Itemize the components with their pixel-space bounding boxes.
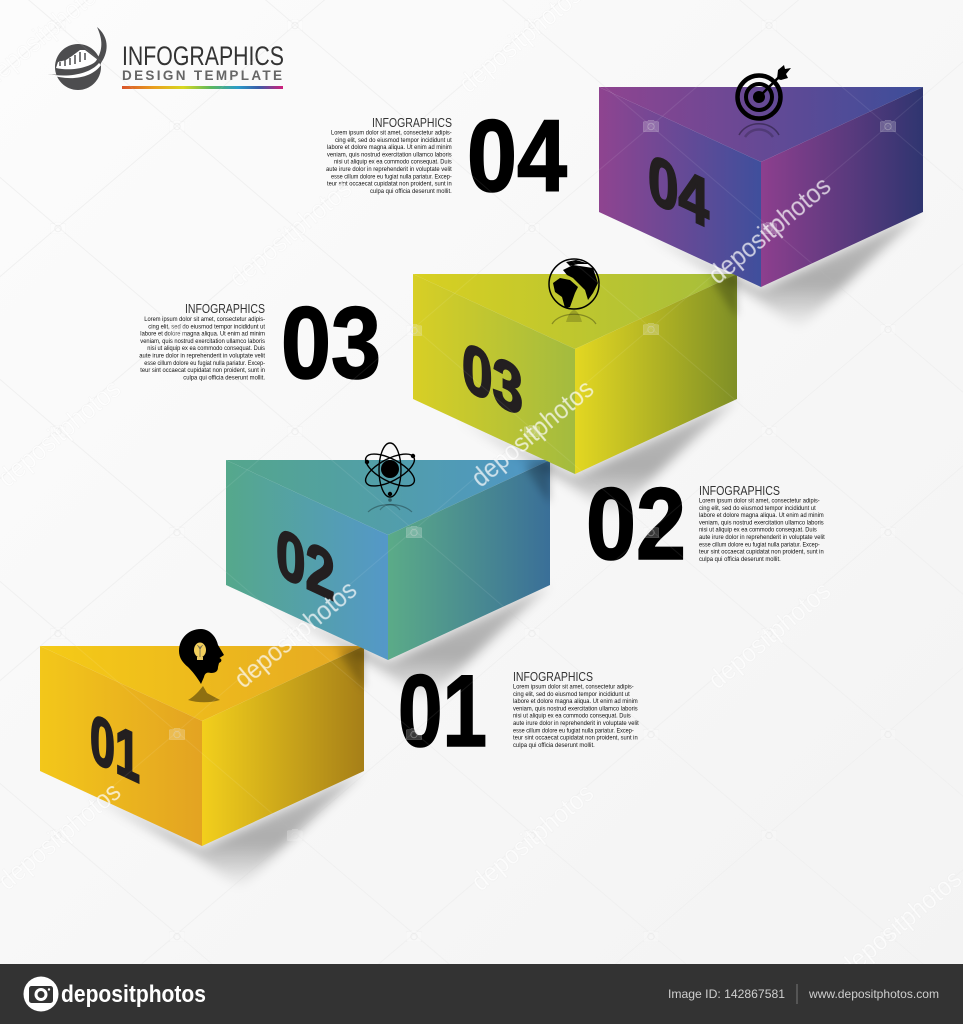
top face — [413, 274, 737, 349]
face number 03: 03 — [462, 327, 523, 431]
body text 02: nisi ut aliquip ex ea commodo consequat. Duis — [699, 527, 817, 534]
step 04 label — [326, 99, 567, 213]
watermark: camera grid — [50, 19, 896, 942]
body text 02: esse cillum dolore eu fugiat nulla pariatur. Excep- — [699, 541, 820, 548]
footer brand name: depositphotos — [61, 981, 206, 1008]
body text 04: veniam, quis nostrud exercitation ullamco laboris — [327, 151, 452, 158]
left face — [226, 460, 388, 660]
step 01 block — [40, 629, 364, 888]
left face — [40, 646, 202, 846]
right face — [575, 274, 737, 474]
step 01 label — [398, 654, 639, 768]
step 03 label — [139, 286, 381, 400]
body text 03: veniam, quis nostrud exercitation ullamco laboris — [140, 338, 266, 345]
body text 01: aute irure dolor in reprehenderit in voluptate velit — [513, 720, 639, 727]
right face — [202, 646, 364, 846]
body text 01: labore et dolore magna aliqua. Ut enim ad minim — [513, 698, 638, 705]
body text 01: culpa qui officia deserunt mollit. — [513, 742, 595, 749]
body text 02: cing elit, sed do eiusmod tempor incididunt ut — [699, 505, 816, 512]
heading 04: INFOGRAPHICS — [372, 116, 452, 130]
body text 03 — [139, 316, 266, 381]
body text 02 — [699, 498, 825, 563]
body text 02: culpa qui officia deserunt mollit. — [699, 556, 781, 563]
step 04 block — [599, 65, 923, 329]
icon: target with arrow — [738, 65, 791, 137]
body text 04 — [326, 130, 452, 195]
logo: infographics design template — [48, 27, 284, 90]
body text 01: nisi ut aliquip ex ea commodo consequat. Duis — [513, 713, 631, 720]
watermark: depositphotos text: depositphotos — [465, 777, 599, 897]
image id: Image ID: 142867581 — [668, 987, 785, 1001]
face number 04: 04 — [648, 139, 709, 244]
left face — [413, 274, 575, 474]
body text 04: esse cillum dolore eu fugiat nulla pariatur. Excep- — [331, 173, 452, 180]
top face — [599, 87, 923, 162]
icon: logo globe with leaf — [48, 27, 107, 90]
body text 03: teur sint occaecat cupidatat non proident, sunt in — [140, 367, 265, 374]
face number 01: 01 — [90, 699, 140, 798]
big number 01: 01 — [398, 654, 487, 768]
body text 01: Lorem ipsum dolor sit amet, consectetur adipis- — [513, 684, 634, 690]
heading 01: INFOGRAPHICS — [513, 670, 593, 684]
big number 03: 03 — [281, 286, 381, 400]
body text 03: aute irure dolor in reprehenderit in voluptate velit — [139, 352, 265, 360]
body text 04: teur sint occaecat cupidatat non proident, sunt in — [327, 181, 452, 188]
body text 03: esse cillum dolore eu fugiat nulla pariatur. Excep- — [144, 360, 265, 367]
step 03 block — [413, 259, 737, 516]
footer bar — [0, 964, 963, 1024]
body text 04: aute irure dolor in reprehenderit in voluptate velit — [326, 166, 452, 173]
icon: globe — [549, 259, 599, 324]
body text 04: labore et dolore magna aliqua. Ut enim ad minim — [327, 144, 452, 151]
body text 01 — [513, 684, 639, 749]
heading 03: INFOGRAPHICS — [185, 302, 265, 316]
big number 02: 02 — [586, 467, 686, 581]
body text 03: nisi ut aliquip ex ea commodo consequat. Duis — [147, 345, 266, 352]
logo subtitle: DESIGN TEMPLATE — [122, 68, 282, 83]
body text 02: veniam, quis nostrud exercitation ullamco laboris — [699, 519, 824, 526]
body text 02: Lorem ipsum dolor sit amet, consectetur adipis- — [699, 498, 820, 504]
body text 04: culpa qui officia deserunt mollit. — [370, 188, 452, 195]
heading 02: INFOGRAPHICS — [699, 484, 780, 498]
body text 02: teur sint occaecat cupidatat non proident, sunt in — [699, 549, 824, 556]
body text 03: Lorem ipsum dolor sit amet, consectetur adipis- — [144, 316, 265, 323]
right face — [388, 460, 550, 660]
body text 02: labore et dolore magna aliqua. Ut enim ad minim — [699, 512, 824, 519]
icon: depositphotos camera — [24, 976, 58, 1012]
watermark: depositphotos text: depositphotos — [702, 575, 836, 695]
body text 04: nisi ut aliquip ex ea commodo consequat. Duis — [334, 159, 452, 166]
body text 01: veniam, quis nostrud exercitation ullamco laboris — [513, 705, 638, 712]
step 02 block — [226, 443, 550, 702]
logo title: INFOGRAPHICS — [122, 41, 284, 71]
body text 01: teur sint occaecat cupidatat non proident, sunt in — [513, 735, 638, 742]
footer url: www.depositphotos.com — [808, 987, 939, 1001]
watermark: depositphotos text: depositphotos — [228, 574, 362, 694]
body text 03: labore et dolore magna aliqua. Ut enim ad minim — [140, 331, 265, 338]
step 02 label — [586, 467, 825, 581]
left face — [599, 87, 761, 287]
body text 01: esse cillum dolore eu fugiat nulla pariatur. Excep- — [513, 727, 634, 734]
body text 04: Lorem ipsum dolor sit amet, consectetur adipis- — [331, 130, 452, 136]
big number 04: 04 — [467, 99, 567, 213]
icon: head with light bulb — [179, 629, 224, 702]
rainbow bar — [122, 86, 283, 89]
body text 03: culpa qui officia deserunt mollit. — [183, 374, 265, 381]
body text 04: cing elit, sed do eiusmod tempor incididunt ut — [335, 137, 452, 144]
top face — [226, 460, 550, 535]
body text 02: aute irure dolor in reprehenderit in voluptate velit — [699, 534, 825, 541]
icon: atom — [361, 443, 419, 512]
watermark: depositphotos text: depositphotos — [223, 173, 357, 293]
watermark: depositphotos text: depositphotos — [702, 170, 836, 290]
top face — [40, 646, 364, 721]
body text 03: cing elit, sed do eiusmod tempor incididunt ut — [148, 323, 265, 330]
body text 01: cing elit, sed do eiusmod tempor incididunt ut — [513, 691, 630, 698]
watermark: depositphotos text: depositphotos — [465, 373, 599, 493]
face number 02: 02 — [276, 513, 335, 617]
right face — [761, 87, 923, 287]
